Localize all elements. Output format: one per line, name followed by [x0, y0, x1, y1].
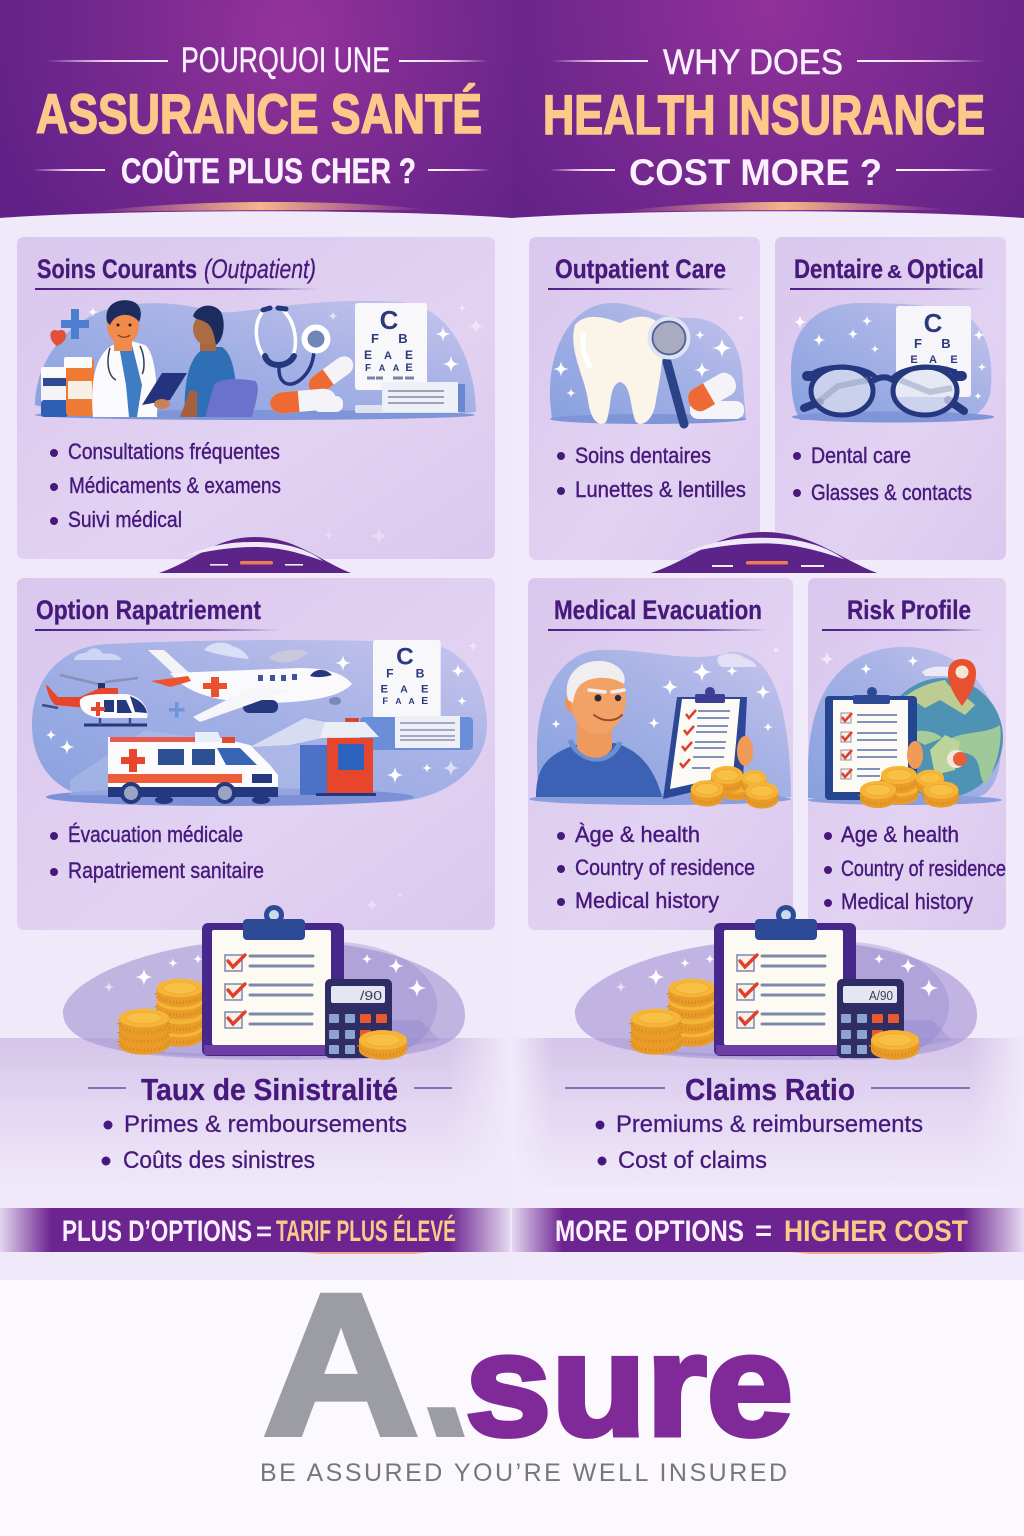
- panel: Claims Ratio: [512, 905, 1024, 1188]
- eye chart: A: [408, 696, 415, 706]
- bullet list: Évacuation médicale: [68, 822, 243, 847]
- marker: [947, 750, 967, 768]
- magnifier: [667, 362, 684, 424]
- bullet list: Soins dentaires: [575, 443, 711, 468]
- eye chart: E: [405, 348, 413, 362]
- capsules: [269, 352, 357, 414]
- eye chart: E: [381, 684, 389, 696]
- logo: A.sure: [260, 1252, 793, 1487]
- bullet list: Consultations fréquentes: [68, 439, 280, 464]
- eye chart: B: [941, 336, 951, 351]
- clipboard: [825, 687, 923, 800]
- bullet list: Glasses & contacts: [811, 480, 972, 505]
- illustration: tooth: [550, 303, 746, 424]
- calculator display: /90: [360, 988, 382, 1003]
- eye chart: B: [398, 331, 408, 346]
- bullet list: Médicaments & examens: [69, 473, 281, 498]
- panel: Dentaire & Optical: [775, 237, 1006, 560]
- bullet list: [50, 822, 264, 883]
- eye chart: A: [379, 363, 386, 373]
- eye chart: A: [384, 350, 392, 362]
- tagline: BE ASSURED YOU’RE WELL INSURED: [260, 1459, 787, 1487]
- eye chart: E: [421, 684, 429, 696]
- panel: Outpatient Care: [529, 237, 760, 560]
- panel: Taux de Sinistralité: [0, 905, 510, 1188]
- icon: heart: [50, 330, 66, 346]
- arrow: right divider: [651, 532, 877, 573]
- heading: Dentaire: [794, 254, 883, 284]
- heading: Optical: [907, 254, 984, 284]
- illustration: doctor consultation: [35, 300, 484, 420]
- capsule: [690, 401, 744, 419]
- map pin: [948, 659, 976, 706]
- bullet list: Lunettes & lentilles: [575, 477, 746, 502]
- heading: &: [887, 262, 902, 282]
- tooth: [573, 317, 663, 424]
- bullet list: Country of residence: [575, 855, 755, 880]
- title line 1: WHY DOES: [663, 43, 843, 82]
- eye chart: E: [405, 362, 413, 374]
- bullet list: [596, 1111, 923, 1174]
- banner: English conclusion: HIGHER COST: [784, 1215, 968, 1248]
- eye chart: [896, 306, 971, 397]
- bullet list: Medical history: [575, 888, 719, 913]
- doctor: [92, 300, 187, 417]
- eye chart: F: [386, 667, 394, 681]
- document: [355, 382, 465, 413]
- panel: Soins Courants: [17, 237, 495, 559]
- eye chart: A: [395, 696, 401, 706]
- icon: plus: [61, 309, 89, 339]
- banner: English conclusion: =: [755, 1215, 772, 1246]
- arrow: left divider: [159, 537, 351, 573]
- panel: Risk Profile: [808, 578, 1006, 930]
- bullet list: Age & health: [841, 822, 959, 847]
- title line 2: ASSURANCE SANTÉ: [36, 82, 482, 145]
- globe: [883, 678, 1003, 798]
- bullet list: [50, 439, 281, 532]
- title line 3: COÛTE PLUS CHER ?: [121, 151, 416, 191]
- coins: [691, 766, 778, 809]
- illustration: glasses: [791, 303, 994, 422]
- illustration: transport: [32, 640, 487, 806]
- heading: (Outpatient): [204, 254, 316, 284]
- plus sign: [169, 702, 184, 718]
- helicopter: [42, 675, 148, 725]
- logo: A.sure: A: [263, 1252, 419, 1477]
- banner: French conclusion: PLUS D’OPTIONS: [62, 1215, 252, 1248]
- banner: French conclusion: TARIF PLUS ÉLEVÉ: [276, 1214, 456, 1248]
- bullet list: [557, 443, 746, 502]
- senior man: [536, 661, 662, 797]
- illustration: globe and checklist: [808, 647, 1003, 808]
- eye chart: A: [400, 685, 408, 696]
- panel: Medical Evacuation: [528, 578, 793, 930]
- eye chart: C: [924, 308, 943, 338]
- illustration: clipboard coins calculator: [63, 905, 465, 1060]
- heading: Medical Evacuation: [554, 595, 762, 625]
- header: French: [0, 0, 512, 218]
- bullet list: [557, 822, 755, 913]
- stethoscope: [256, 308, 328, 384]
- eye chart: A: [929, 354, 937, 366]
- bullet list: Primes & remboursements: [124, 1111, 407, 1138]
- header: English: [512, 0, 1024, 218]
- medicine bottles: [41, 357, 94, 417]
- glasses: [804, 367, 964, 415]
- coins: [860, 766, 958, 808]
- illustration: senior and checklist: [529, 646, 791, 809]
- bullet list: Àge & health: [575, 822, 700, 847]
- heading: Taux de Sinistralité: [141, 1072, 398, 1107]
- eye chart: E: [364, 348, 372, 362]
- calculator display: A/90: [869, 988, 893, 1003]
- heading: Soins Courants: [37, 254, 197, 284]
- eye chart: C: [380, 305, 399, 335]
- bullet list: Suivi médical: [68, 507, 182, 532]
- title line 1: POURQUOI UNE: [181, 41, 390, 80]
- banner: French conclusion: =: [256, 1216, 272, 1246]
- bullet list: [102, 1111, 407, 1174]
- eye chart: E: [950, 354, 958, 366]
- eye chart: B: [416, 667, 425, 681]
- heading: Option Rapatriement: [36, 595, 261, 625]
- banner: English conclusion: MORE OPTIONS: [555, 1215, 744, 1248]
- bullet list: Premiums & reimbursements: [616, 1111, 923, 1138]
- eye chart: F: [365, 363, 371, 374]
- banner: English conclusion: [512, 1208, 1024, 1254]
- document and booth: [250, 716, 473, 796]
- heading: Claims Ratio: [685, 1072, 855, 1107]
- eye chart: E: [910, 354, 918, 366]
- bullet list: [793, 443, 972, 505]
- eye chart: A: [393, 363, 400, 373]
- bullet list: Coûts des sinistres: [123, 1147, 315, 1174]
- patient: [180, 306, 258, 417]
- plane: [148, 650, 352, 722]
- ambulance: [108, 732, 278, 804]
- panel: Option Rapatriement: [17, 578, 495, 930]
- bullet list: [824, 822, 1006, 914]
- eye chart: F: [382, 695, 388, 706]
- eye chart: E: [421, 696, 428, 707]
- bullet list: Cost of claims: [618, 1147, 767, 1174]
- eye chart: C: [396, 643, 414, 670]
- bullet list: Medical history: [841, 889, 973, 914]
- banner: French conclusion: [0, 1208, 510, 1254]
- logo: A.sure: .: [364, 1257, 493, 1480]
- heading: Risk Profile: [847, 595, 971, 625]
- eye chart: [373, 640, 441, 722]
- title line 3: COST MORE ?: [629, 152, 882, 193]
- illustration: clipboard coins calculator: [575, 905, 977, 1060]
- bullet list: Dental care: [811, 443, 911, 468]
- eye chart: F: [371, 331, 379, 346]
- heading: Outpatient Care: [555, 254, 726, 284]
- bullet list: Rapatriement sanitaire: [68, 858, 264, 883]
- eye chart: [355, 303, 427, 390]
- eye chart: E: [951, 368, 958, 379]
- eye chart: F: [914, 336, 922, 351]
- logo: A.sure: sure: [465, 1304, 793, 1466]
- heading: [794, 254, 984, 284]
- clipboard: [663, 687, 753, 799]
